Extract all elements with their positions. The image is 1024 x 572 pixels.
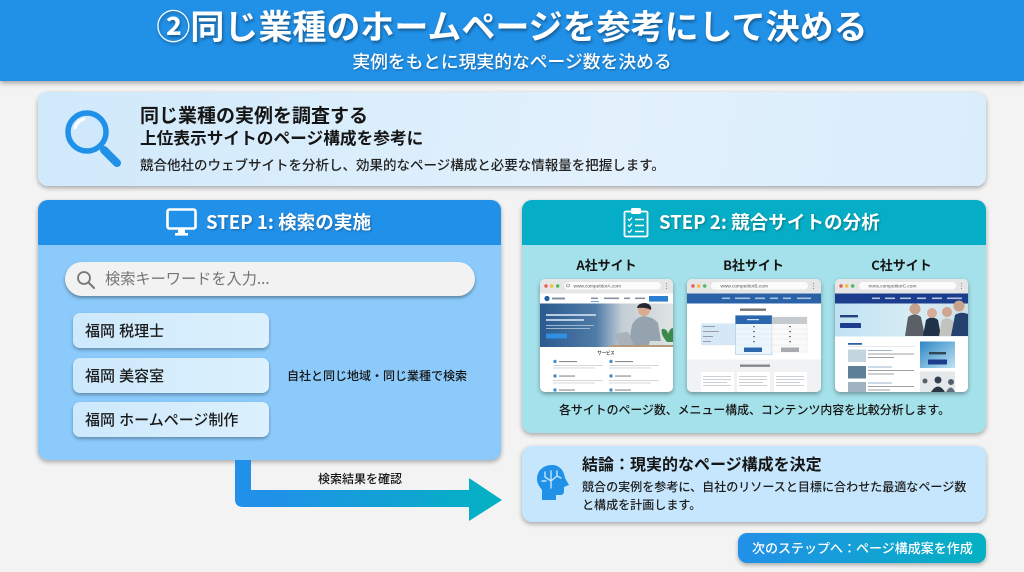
search bar (65, 262, 475, 296)
icon: clipboard checklist (624, 208, 648, 238)
title: ②同じ業種のホームページを参考にして決める (156, 9, 868, 47)
step 2 heading: STEP 2: 競合サイトの分析 (659, 208, 880, 235)
icon: head with brain (537, 465, 569, 500)
browser mockup: site A: www.competitorA.com (574, 284, 621, 290)
button label: 次のステップへ：ページ構成案を作成 (752, 541, 973, 556)
step 1 header (38, 200, 501, 245)
keyword chip 1 (73, 313, 269, 348)
keyword chip 2 (73, 358, 269, 393)
browser mockup: site B: www.competitorB.com (720, 284, 768, 290)
step 2 caption: 各サイトのページ数、メニュー構成、コンテンツ内容を比較分析します。 (559, 403, 950, 417)
browser mockup: site A (540, 279, 673, 392)
step 2 header (522, 200, 986, 245)
next step button (738, 533, 986, 563)
keyword chip 3 (73, 402, 269, 437)
step 1 heading: STEP 1: 検索の実施 (206, 208, 371, 235)
search placeholder: 検索キーワードを入力... (105, 267, 270, 289)
intro heading: 同じ業種の実例を調査する (140, 106, 368, 127)
browser mockup: site A: サービス (597, 350, 615, 356)
keyword chip 3: 福岡 ホームページ制作 (85, 412, 238, 429)
conclusion text: 競合の実例を参考に、自社のリソースと目標に合わせた最適なページ数と構成を計画します。 (582, 480, 966, 512)
header banner (0, 0, 1024, 81)
panel: step 2 (522, 200, 986, 433)
subtitle: 実例をもとに現実的なページ数を決める (352, 52, 672, 72)
browser mockup: site C (835, 279, 968, 392)
intro subheading: 上位表示サイトのページ構成を参考に (140, 129, 423, 148)
browser mockup: site B (687, 279, 821, 392)
browser mockup: site C: mms.competitorC.com (868, 284, 916, 290)
arrow: step 1 to conclusion (235, 460, 502, 521)
icon: magnifier (65, 110, 121, 167)
conclusion heading: 結論：現実的なページ構成を決定 (582, 457, 822, 474)
panel: research intro (38, 92, 986, 186)
panel: conclusion (522, 446, 986, 522)
label: site A: A社サイト (576, 255, 637, 274)
intro description: 競合他社のウェブサイトを分析し、効果的なページ構成と必要な情報量を把握します。 (140, 158, 665, 173)
arrow label: 検索結果を確認 (318, 472, 402, 486)
icon: search (77, 271, 95, 289)
keyword chip 2: 福岡 美容室 (85, 368, 164, 385)
keyword chip 1: 福岡 税理士 (85, 323, 164, 340)
panel: step 1 (38, 200, 501, 460)
label: site B: B社サイト (723, 255, 784, 274)
label: site C: C社サイト (871, 255, 932, 274)
icon: monitor (166, 208, 197, 236)
search note: 自社と同じ地域・同じ業種で検索 (287, 369, 467, 383)
